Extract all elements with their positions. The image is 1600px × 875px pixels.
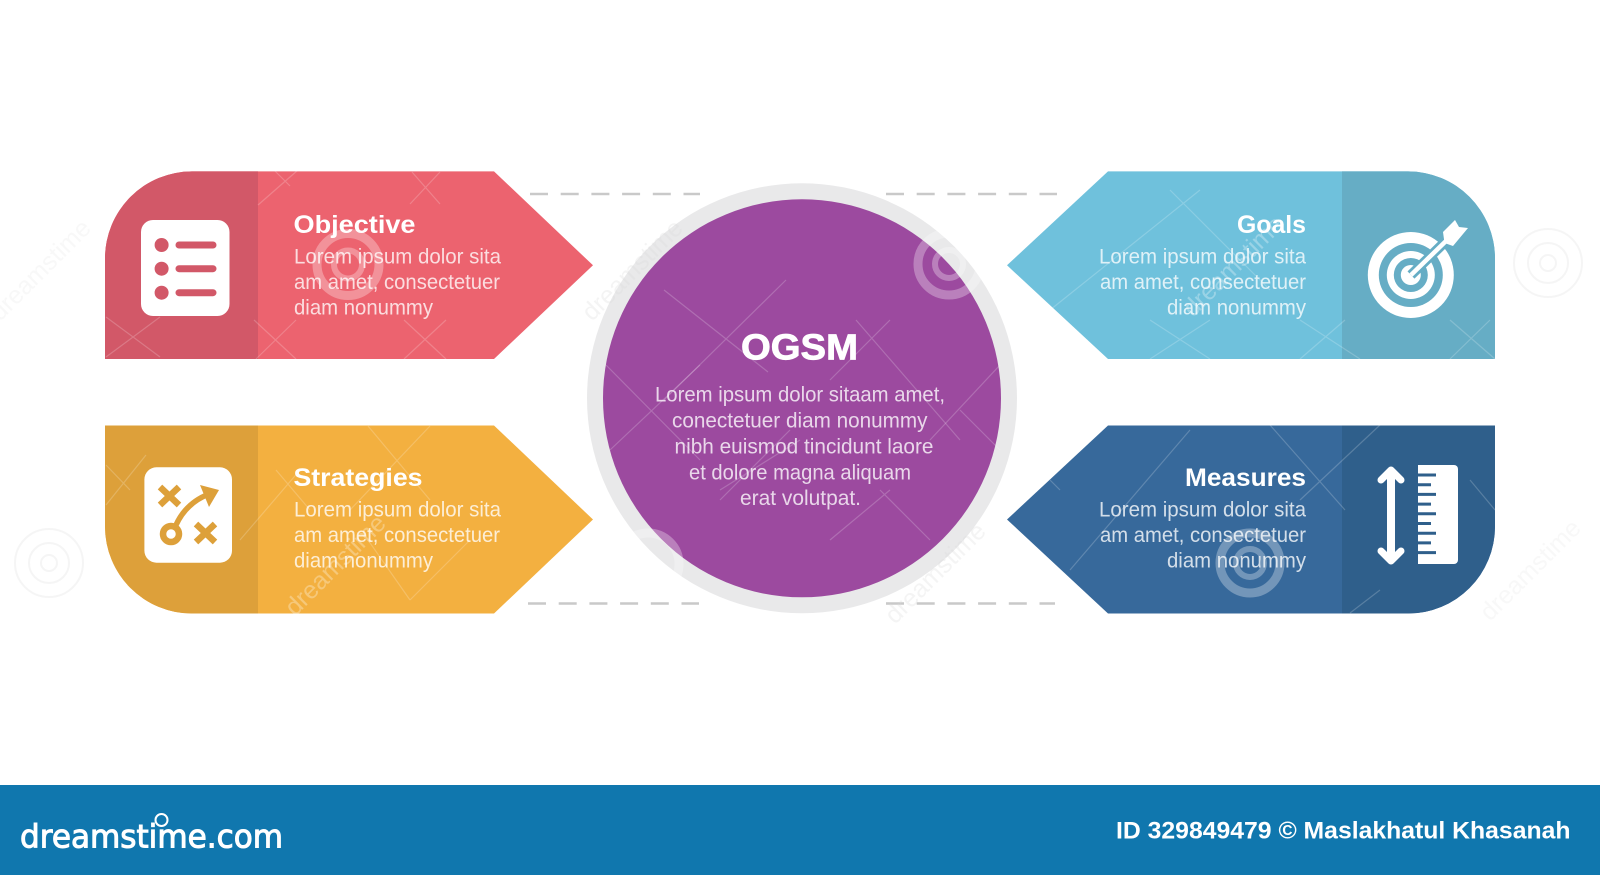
connector dashes: top right	[886, 193, 1057, 195]
icon: checklist	[141, 220, 230, 316]
text block: measures: Lorem ipsum dolor sita	[1099, 499, 1306, 522]
text block: goals: diam nonummy	[1167, 296, 1306, 319]
text block: strategies: am amet, consectetuer	[294, 524, 500, 547]
credit text: ID 329849479 © Maslakhatul Khasanah	[1116, 817, 1570, 844]
text block: objective: Lorem ipsum dolor sita	[294, 245, 501, 268]
heading: goals: Goals	[1237, 211, 1306, 239]
logo: dreamstime: dreamstime.com	[20, 818, 283, 856]
text block: strategies: diam nonummy	[294, 549, 433, 572]
connector dashes: bottom left	[528, 602, 699, 605]
text block: goals: Lorem ipsum dolor sita	[1099, 245, 1306, 268]
panel: goals	[1007, 171, 1495, 359]
text block: OGSM description: Lorem ipsum dolor sitaam amet,	[655, 384, 945, 407]
text block: goals: am amet, consectetuer	[1100, 271, 1306, 294]
connector dashes: top left	[530, 193, 700, 195]
watermark: rotated text: dreamstime	[879, 517, 992, 629]
icon: ruler and double arrow	[1381, 465, 1458, 564]
text block: strategies: Lorem ipsum dolor sita	[294, 499, 501, 522]
text block: strategies	[294, 499, 501, 572]
text block: objective	[294, 245, 501, 319]
watermark: spirals	[15, 229, 1582, 597]
watermark: rotated text: dreamstime	[1177, 210, 1290, 322]
heading: OGSM: OGSM	[741, 326, 858, 367]
panel: central circle	[587, 183, 1017, 613]
panel: objective	[105, 171, 593, 359]
heading: objective: Objective	[294, 211, 416, 239]
text block: objective: diam nonummy	[294, 296, 433, 319]
watermark: rotated text: dreamstime	[576, 214, 689, 326]
text block: measures: am amet, consectetuer	[1100, 524, 1306, 547]
watermark: diagonal crosses	[106, 170, 1495, 613]
text block: measures: diam nonummy	[1167, 549, 1306, 572]
panel: measures	[1007, 426, 1495, 614]
panel: strategies	[105, 426, 593, 614]
watermark: rotated text: dreamstime	[279, 509, 392, 621]
text block: OGSM description	[655, 384, 945, 510]
text block: OGSM description: erat volutpat.	[740, 487, 861, 510]
text block: OGSM description: conectetuer diam nonummy	[672, 409, 928, 432]
text block: measures	[1099, 499, 1306, 572]
text block: goals	[1099, 245, 1306, 319]
icon: target with arrow	[1368, 220, 1468, 318]
watermark: rotated text: dreamstime	[1474, 514, 1587, 626]
connector dashes: bottom right	[886, 602, 1055, 605]
icon: strategy play	[144, 467, 232, 563]
footer bar	[0, 785, 1600, 875]
watermark: rotated text	[0, 210, 1587, 629]
text block: OGSM description: nibh euismod tincidunt laore	[674, 435, 934, 458]
text block: OGSM description: et dolore magna aliquam	[689, 461, 911, 484]
text block: objective: am amet, consectetuer	[294, 271, 500, 294]
heading: measures: Measures	[1185, 464, 1306, 492]
heading: strategies: Strategies	[294, 464, 422, 492]
